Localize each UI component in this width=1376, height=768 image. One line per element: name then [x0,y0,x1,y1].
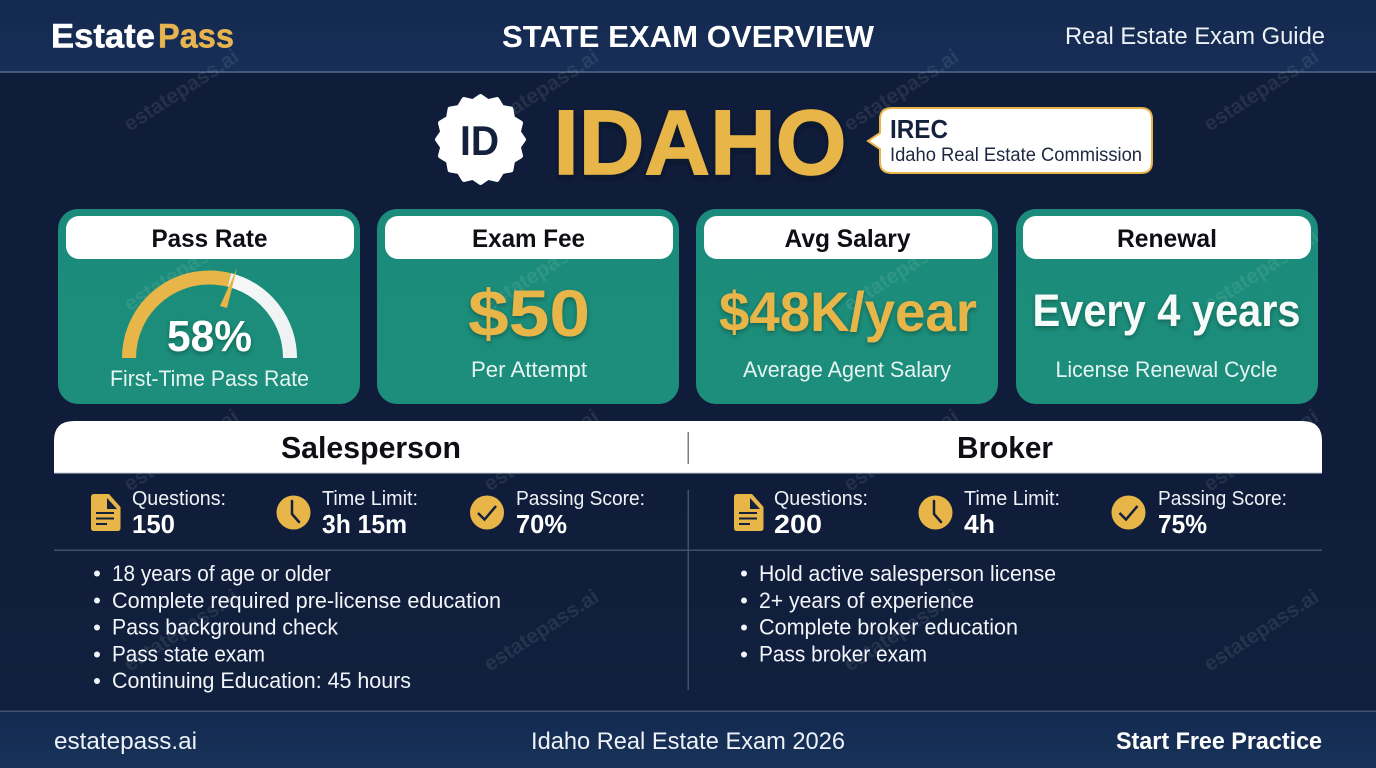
logo [51,18,234,56]
panel: average salary [704,216,992,382]
broker requirements list: Complete broker education [759,614,1018,640]
panel: broker stats: 200 [774,509,822,539]
gauge [129,268,290,358]
watermarks: estatepass.ai [480,405,603,496]
watermarks: estatepass.ai [840,585,963,676]
watermarks: estatepass.ai [1200,405,1323,496]
panel: pass rate: First-Time Pass Rate [110,366,309,391]
state name: IDAHO [554,92,846,194]
panel: salesperson stats: 70% [516,509,567,539]
panel: broker stats [734,488,1287,539]
panel: pass rate: Pass Rate [152,225,268,253]
header title: STATE EXAM OVERVIEW [502,19,875,54]
state badge: ID [460,117,499,164]
watermarks: estatepass.ai [840,225,963,316]
panel: broker stats: Passing Score: [1158,488,1287,510]
KPI card backgrounds [58,209,1318,404]
salesperson requirements list: Pass background check [112,614,339,640]
section header bar [54,421,1322,474]
panel: salesperson stats: Questions: [132,488,226,510]
salesperson requirements list: 18 years of age or older [112,561,331,586]
watermarks [120,45,1323,676]
panel: exam fee: Exam Fee [472,225,585,253]
icon: check [1112,496,1146,530]
icon: check [470,496,504,530]
panel: broker stats: Questions: [774,488,868,510]
watermarks: estatepass.ai [1200,45,1323,136]
salesperson requirements list: Continuing Education: 45 hours [112,668,411,693]
section dividers [54,490,1322,690]
icon: clock [276,496,310,530]
panel: renewal: Every 4 years [1032,285,1300,336]
icon: document [734,494,764,531]
footer title: Idaho Real Estate Exam 2026 [531,728,845,755]
watermarks: estatepass.ai [840,45,963,136]
footer [0,710,1376,768]
watermarks: estatepass.ai [120,585,243,676]
broker requirements list [741,561,1056,666]
logo: Pass [158,18,234,56]
panel: broker stats: 4h [964,509,995,539]
watermarks: estatepass.ai [1200,585,1323,676]
broker requirements list: Hold active salesperson license [759,561,1056,586]
logo: Estate [51,18,155,56]
panel: broker stats: Time Limit: [964,488,1060,510]
panel: exam fee: $50 [468,276,590,350]
panel: broker stats: 75% [1158,509,1207,539]
panel: pass rate [66,216,354,391]
footer call to action: Start Free Practice [1116,728,1322,755]
panel: salesperson stats: Passing Score: [516,488,645,510]
salesperson requirements list: Pass state exam [112,642,265,666]
watermarks: estatepass.ai [480,585,603,676]
salesperson requirements list: Complete required pre-license education [112,588,501,613]
panel: exam fee [385,216,673,382]
callout: commission: Idaho Real Estate Commission [890,145,1142,166]
icon: document [91,494,120,531]
header subtitle: Real Estate Exam Guide [1065,23,1325,50]
icon: clock [918,496,952,530]
panel: salesperson stats [91,488,645,539]
panel: salesperson stats: 3h 15m [322,509,407,539]
callout: commission: IREC [890,114,948,144]
panel: renewal: License Renewal Cycle [1056,357,1278,382]
watermarks: estatepass.ai [120,405,243,496]
section header bar: Salesperson [281,430,461,465]
footer site: estatepass.ai [54,728,197,755]
panel: pass rate: 58% [167,312,252,361]
panel: salesperson stats: Time Limit: [322,488,418,510]
watermarks: estatepass.ai [480,225,603,316]
watermarks: estatepass.ai [120,45,243,136]
section header bar: Broker [957,430,1053,465]
watermarks: estatepass.ai [1200,225,1323,316]
panel: salesperson stats: 150 [132,509,175,539]
panel: renewal: Renewal [1117,225,1217,253]
callout: commission [868,108,1152,173]
panel: average salary: $48K/year [719,280,977,343]
watermarks: estatepass.ai [840,405,963,496]
broker requirements list: 2+ years of experience [759,588,974,613]
state badge [438,96,524,182]
header bar [0,0,1376,73]
panel: average salary: Average Agent Salary [743,357,951,382]
watermarks: estatepass.ai [480,45,603,136]
salesperson requirements list [94,561,501,693]
panel: exam fee: Per Attempt [471,357,587,382]
panel: average salary: Avg Salary [784,225,911,253]
watermarks: estatepass.ai [120,225,243,316]
broker requirements list: Pass broker exam [759,642,927,666]
panel: renewal [1023,216,1311,382]
